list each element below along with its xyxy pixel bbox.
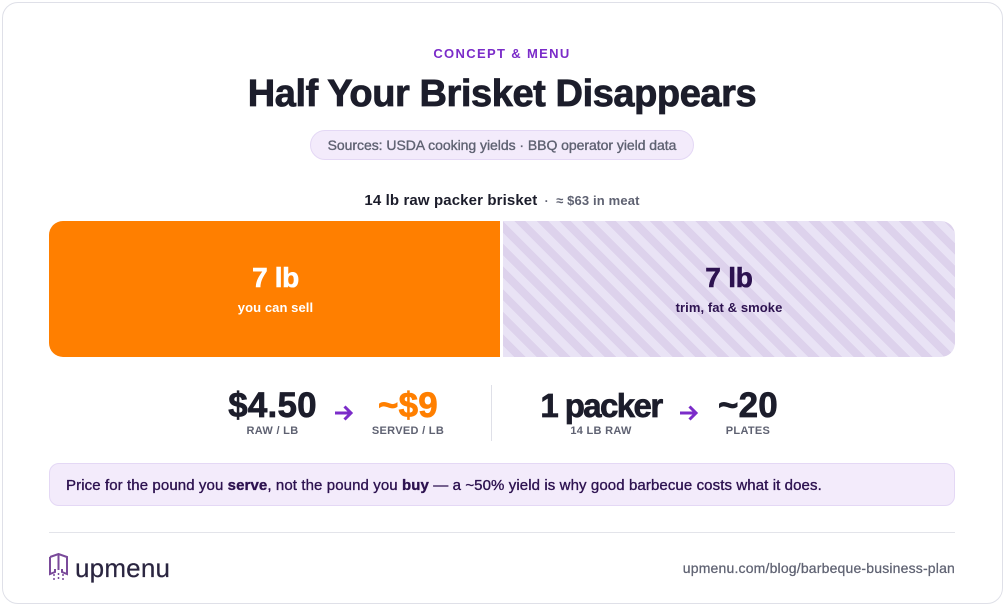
stat: raw price: $4.50 [228,386,317,425]
stat: one packer: 14 LB RAW [570,425,632,437]
value: 7 lb sellable: 7 lb [252,262,299,293]
sources pill [310,130,694,160]
callout [49,463,955,506]
wordmark: upmenu [75,553,170,583]
arrow: raw to served [335,406,353,420]
label: trim, fat and smoke: trim, fat & smoke [676,300,782,315]
arrow: packer to plates [680,406,698,420]
stat: raw price: RAW / LB [247,425,298,437]
callout: Price for the pound you serve, not the pound you buy — a ~50% yield is why good barbecue costs what it does. [66,477,822,494]
icon: menu book [49,553,68,580]
title: Half Your Brisket Disappears [248,73,756,115]
source url: upmenu.com/blog/barbeque-business-plan [683,560,955,576]
eyebrow: CONCEPT & MENU [433,46,571,61]
stat: plates: ~20 [718,386,778,425]
stat: served price [372,386,444,437]
stat: plates: PLATES [726,425,770,437]
stat: served price: ~$9 [378,386,438,425]
value: 7 lb lost: 7 lb [705,262,753,293]
bar caption: 14 lb raw packer brisket · ≈ $63 in meat [364,192,640,209]
stat: one packer: 1 packer [540,387,662,424]
yield bar [49,221,955,357]
sources pill: Sources: USDA cooking yields · BBQ operator yield data [328,137,676,153]
segment: sellable meat [49,221,500,357]
segment: lost meat [503,221,955,357]
divider [491,385,492,441]
label: you can sell: you can sell [238,300,313,315]
footer rule [49,532,955,533]
logo [49,553,170,583]
stat: served price: SERVED / LB [372,425,444,437]
